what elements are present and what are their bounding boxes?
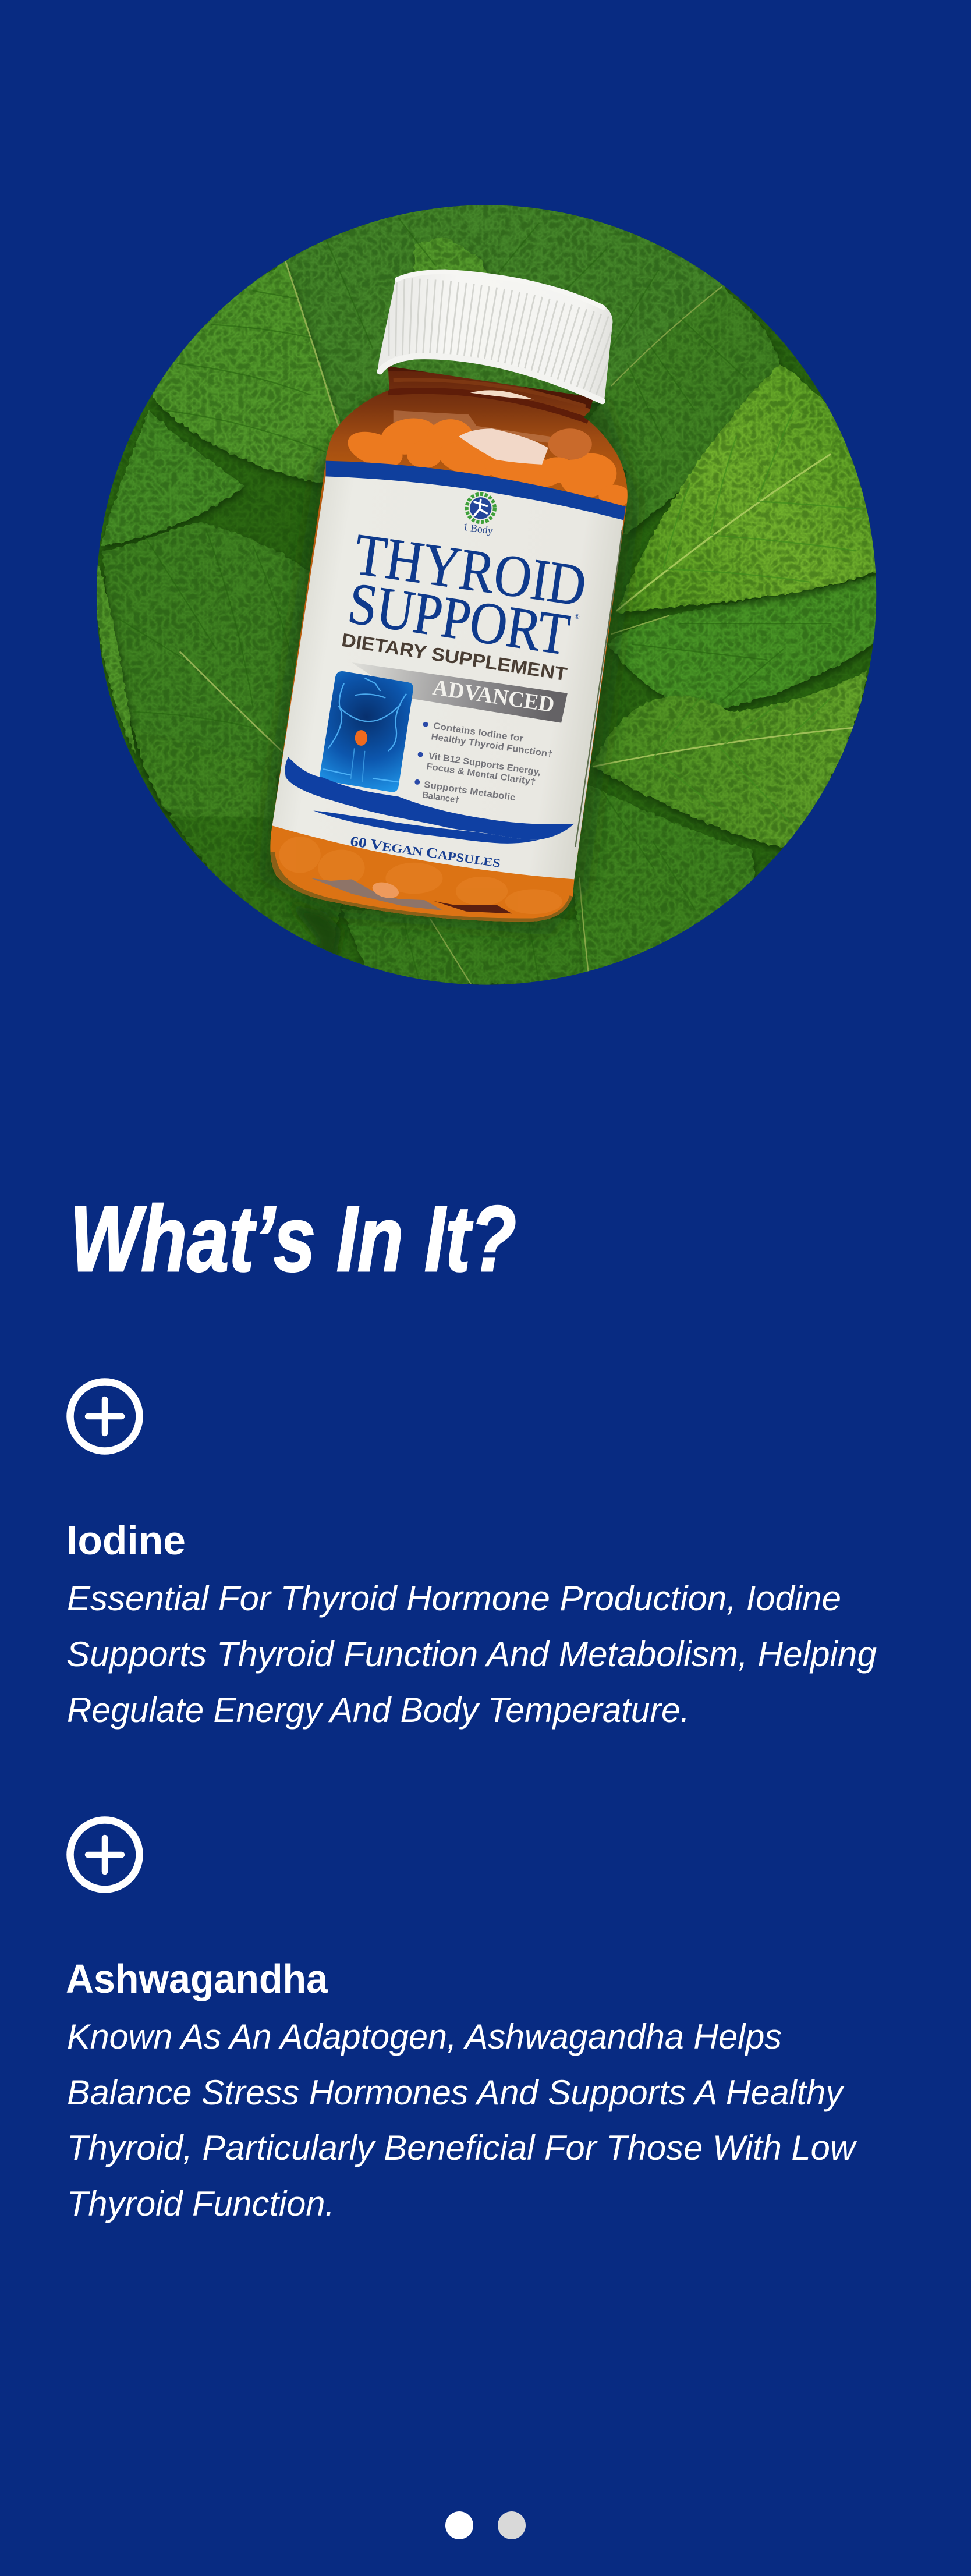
shoulder reflection: [394, 410, 559, 444]
ingredient text: iodine: Supports Thyroid Function And Metabolism, Helping: [66, 1635, 877, 1674]
ingredient text: iodine: [66, 1579, 877, 1730]
leaf: upper right: [589, 286, 781, 535]
capsule count: 60 VEGAN CAPSULES: [349, 834, 502, 871]
thyroid illustration: [310, 662, 422, 800]
benefit bullets: Supports Metabolic: [423, 779, 516, 803]
benefit bullets: Contains Iodine for: [433, 721, 524, 744]
cap: [378, 270, 612, 404]
benefit bullets: Balance†: [421, 790, 460, 805]
ingredient text: iodine: Regulate Energy And Body Temperature.: [67, 1691, 690, 1730]
benefit bullets: Focus & Mental Clarity†: [426, 761, 536, 787]
leaf: bottom left dark: [170, 815, 343, 952]
ingredient text: ashwagandha: [67, 2017, 857, 2223]
ingredient text: ashwagandha: Thyroid, Particularly Beneficial For Those With Low: [67, 2128, 857, 2167]
leaf: top centre: [279, 200, 726, 437]
label side panel edge: [575, 530, 622, 847]
capsule glare: [459, 428, 548, 465]
dietary supplement line: DIETARY SUPPLEMENT: [340, 629, 569, 685]
ingredient heading: ashwagandha: Ashwagandha: [66, 1956, 328, 2001]
dark crack between bottom leaves: [289, 904, 341, 985]
label paper: [272, 476, 623, 879]
cap body: [378, 270, 612, 404]
leaf veins: [118, 218, 861, 985]
lower glass reflection: [311, 878, 443, 910]
leaf: left lobe: [101, 410, 245, 547]
ingredient text: ashwagandha: Balance Stress Hormones And Supports A Healthy: [67, 2073, 845, 2112]
cap top rim: [397, 272, 603, 307]
leaf texture: [81, 192, 896, 1007]
advanced banner: ADVANCED: [431, 675, 556, 717]
label: [272, 461, 626, 879]
leaf: top light fold: [412, 238, 490, 274]
leaf background: [81, 192, 896, 1007]
product name: [344, 521, 590, 668]
label swooshes: [285, 757, 574, 844]
benefit bullets: Vit B12 Supports Energy,: [428, 751, 541, 777]
ingredient heading: iodine: Iodine: [66, 1518, 186, 1563]
product name: SUPPORT: [344, 570, 574, 668]
product name: THYROID: [350, 521, 590, 619]
leaf: bottom centre: [341, 909, 591, 985]
ingredient text: ashwagandha: Thyroid Function.: [67, 2184, 335, 2223]
leaf: far left sliver: [96, 556, 136, 756]
advanced banner: [352, 662, 568, 723]
brand logo: 1 Body: [462, 521, 494, 537]
bottle: [258, 270, 637, 930]
leaf: lower left secondary: [133, 730, 277, 821]
carousel pagination dots: [445, 2511, 526, 2539]
leaf: right lower: [592, 670, 867, 848]
icon: plus in circle (ashwagandha): [70, 1820, 140, 1890]
ingredient text: iodine: Essential For Thyroid Hormone Production, Iodine: [67, 1579, 841, 1618]
benefit bullets: Healthy Thyroid Function†: [430, 732, 553, 760]
benefit bullets: [414, 721, 553, 805]
product photo: circular leaf image with bottle: [81, 192, 896, 1007]
shadow under bottle: [258, 395, 640, 936]
leaf: lower left: [102, 522, 310, 813]
leaf: bottom right: [573, 779, 754, 982]
leaf: right mid dark: [608, 574, 880, 712]
product name: ®: [574, 612, 580, 621]
glass body: [258, 356, 637, 930]
neck threads: [385, 356, 593, 410]
leaf: right bright: [617, 364, 877, 613]
ingredient text: ashwagandha: Known As An Adaptogen, Ashwagandha Helps: [67, 2017, 782, 2056]
leaf: upper left: [152, 263, 341, 483]
brand logo: [462, 494, 495, 537]
bottom rim: [272, 852, 573, 922]
capsules above label: [343, 414, 630, 508]
title: What’s In It?: [70, 1186, 516, 1291]
cap ribs: [388, 317, 611, 359]
icon: plus in circle (iodine): [70, 1382, 140, 1451]
cap lower rim: [380, 356, 603, 401]
label top blue band: [326, 461, 626, 520]
lower capsules: [268, 818, 575, 925]
neck highlight: [470, 390, 534, 399]
